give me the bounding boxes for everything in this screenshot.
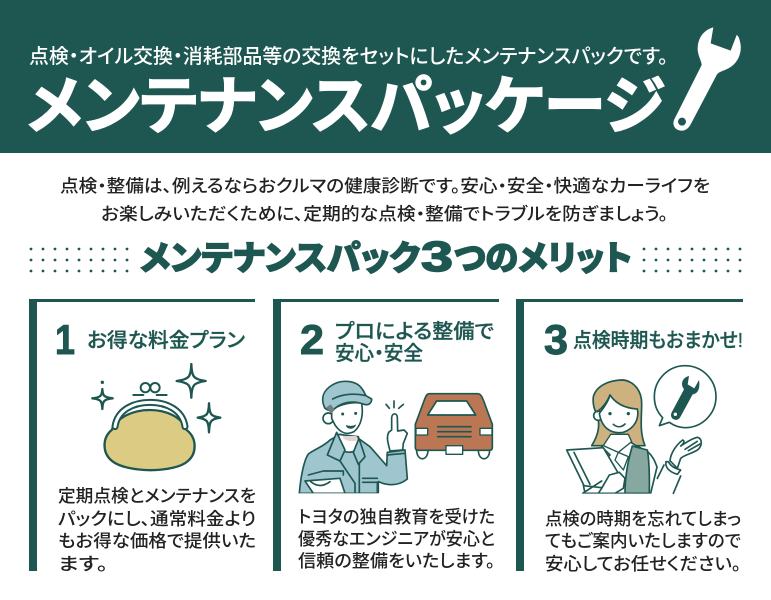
intro text: お楽しみいただくために、定期的な点検・整備でトラブルを防ぎましょう。 bbox=[101, 204, 668, 224]
heading: merit 1: お得な料金プラン bbox=[87, 329, 245, 352]
panel: merit 2 bbox=[273, 299, 499, 571]
illustration: woman with clipboard bbox=[560, 380, 690, 496]
intro text bbox=[60, 176, 710, 224]
illustration: mechanic bbox=[299, 381, 409, 495]
number 3: 3 bbox=[544, 316, 568, 363]
body text: merit 3: てもご案内いたしますので bbox=[545, 531, 741, 551]
section heading bbox=[140, 233, 632, 281]
header subtitle: 点検・オイル交換・消耗部品等の交換をセットにしたメンテナンスパックです。 bbox=[29, 45, 668, 68]
body text: merit 3: 安心してお任せください。 bbox=[545, 554, 741, 574]
heading: merit 3: 点検時期もおまかせ! bbox=[573, 329, 743, 352]
decorative dots right bbox=[643, 248, 741, 272]
panel: header banner bbox=[0, 0, 771, 153]
number 1: 1 bbox=[55, 316, 75, 363]
panel: merit 3 bbox=[516, 299, 743, 574]
body text: merit 1: ます。 bbox=[58, 554, 108, 574]
body text: merit 2: トヨタの独自教育を受けた bbox=[298, 507, 495, 527]
body text: merit 2: 優秀なエンジニアが安心と bbox=[298, 529, 495, 549]
heading: merit 2: 安心・安全 bbox=[335, 342, 423, 365]
body text: merit 1: 定期点検とメンテナンスを bbox=[58, 486, 256, 506]
body text: merit 1 bbox=[57, 486, 256, 574]
body text: merit 2 bbox=[298, 507, 495, 571]
body text: merit 2: 信頼の整備をいたします。 bbox=[298, 551, 495, 571]
section heading: メンテナンスパック bbox=[140, 240, 421, 278]
decorative dots left bbox=[30, 248, 128, 272]
panel: merit 1 bbox=[29, 299, 256, 574]
illustration: open hand and sleeve bbox=[657, 437, 701, 493]
icon: wrench bbox=[673, 27, 741, 131]
number 2: 2 bbox=[300, 316, 324, 363]
intro text: 点検・整備は、例えるならおクルマの健康診断です。安心・安全・快適なカーライフを bbox=[60, 176, 710, 196]
illustration: speech bubble with wrench bbox=[654, 366, 716, 428]
illustration: car bbox=[415, 394, 492, 459]
section heading: つのメリット bbox=[454, 240, 632, 278]
section heading: 3 bbox=[421, 233, 453, 281]
body text: merit 3 bbox=[545, 509, 741, 574]
main title: メンテナンスパッケージ bbox=[27, 72, 665, 142]
body text: merit 3: 点検の時期を忘れてしまっ bbox=[545, 509, 741, 529]
heading: merit 2: プロによる整備で bbox=[335, 320, 494, 343]
body text: merit 1: もお得な価格で提供いた bbox=[58, 531, 256, 551]
body text: merit 1: パックにし、通常料金より bbox=[57, 509, 256, 529]
heading: merit 2 bbox=[335, 320, 494, 365]
icon: coin purse with sparkles bbox=[92, 364, 220, 470]
